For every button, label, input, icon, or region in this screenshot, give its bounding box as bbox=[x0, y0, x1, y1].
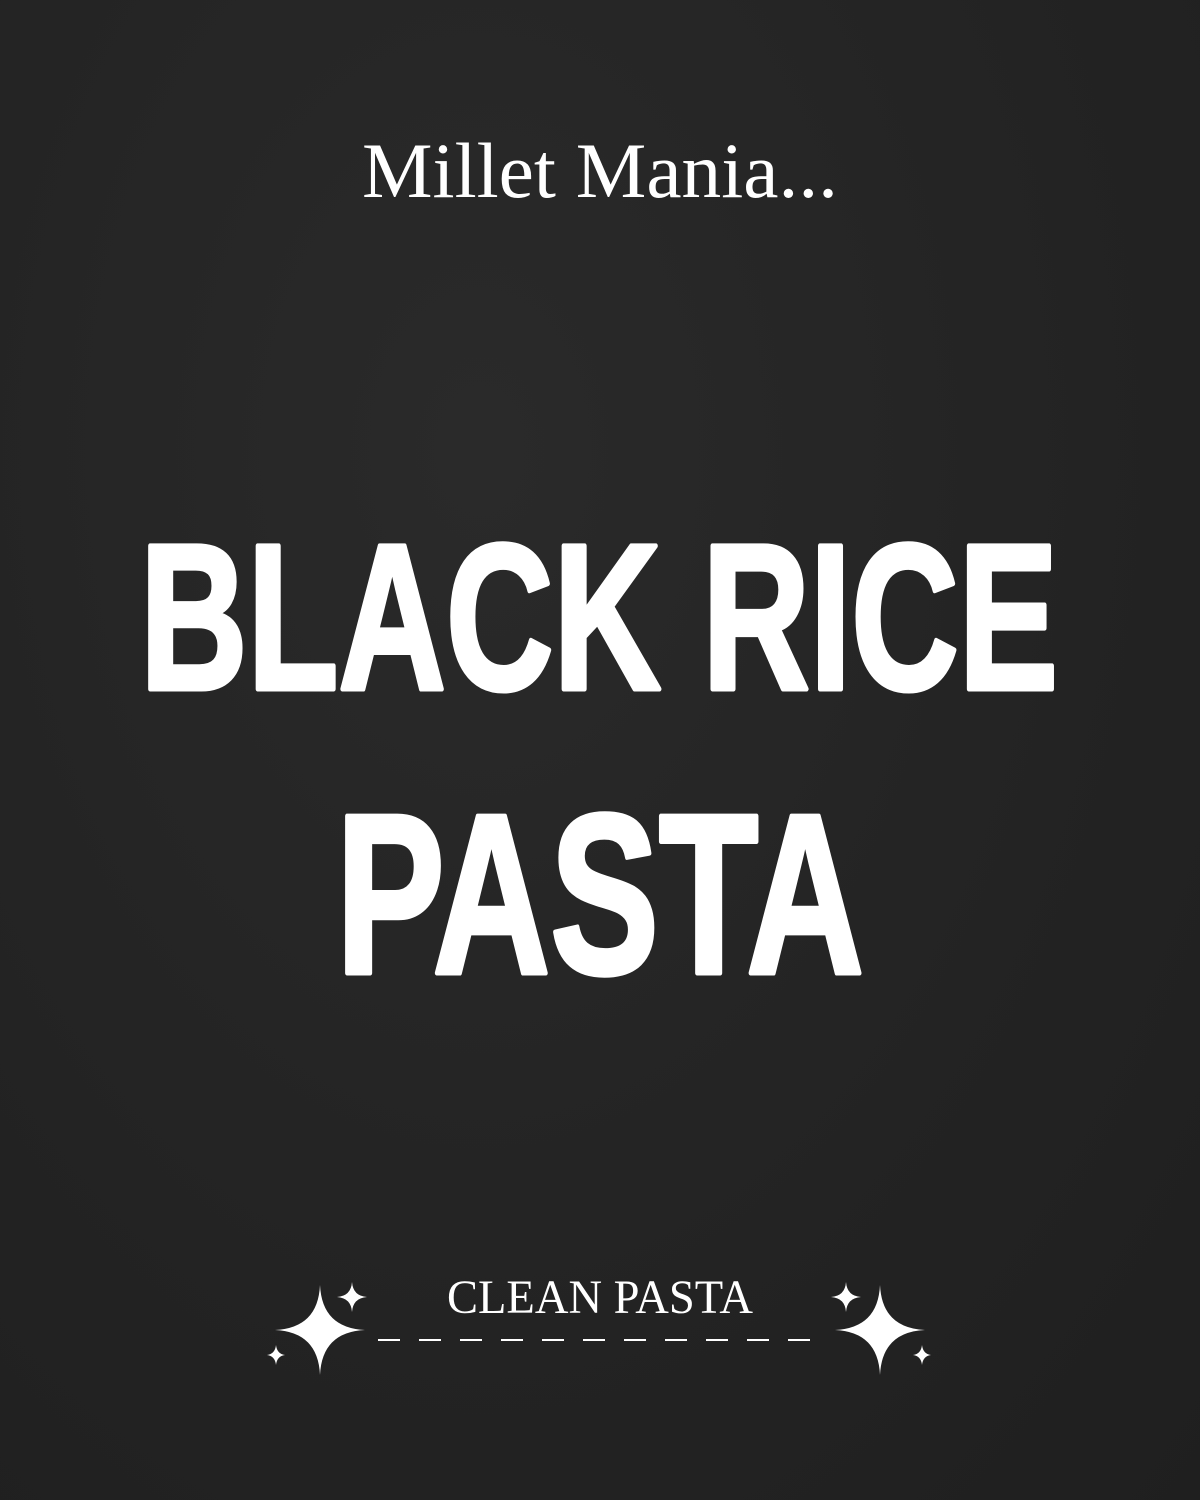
brand: CLEAN PASTA: CLEAN PASTA bbox=[447, 1271, 753, 1324]
title line 2: PASTA bbox=[336, 768, 864, 1022]
dashed line bbox=[378, 1339, 826, 1341]
icon: sparkles left bbox=[267, 1282, 367, 1375]
icon: sparkles right bbox=[831, 1282, 931, 1375]
subtitle: Millet Mania: Millet Mania... bbox=[362, 127, 838, 214]
